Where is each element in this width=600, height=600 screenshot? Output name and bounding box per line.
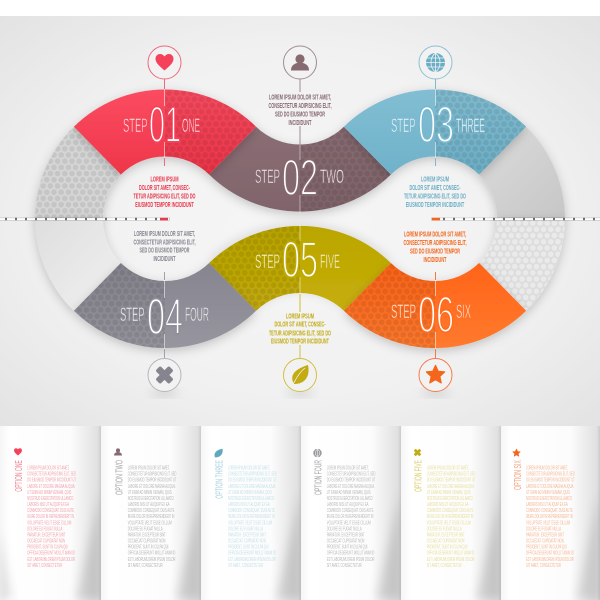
text block: option two body: PROIDENT, SUNT IN CULPA QUI [128,545,168,551]
text block: option five body: CONSECTETUR ADIPISICING ELIT, SED [427,472,476,478]
card: option five [401,426,501,600]
panel: step one band [74,89,256,174]
text block: step one caption: EIUSMOD TEMPOR INCIDIDUNT [135,202,194,209]
text: ONE [182,116,200,137]
text block: option three body: LABORE ET DOLORE MAGNA ALIQUA. [228,484,276,490]
text block: option three body: DOLORE EU FUGIAT NULLA [228,526,263,532]
left stitched seam [0,218,170,221]
text block: option five body: LOREM IPSUM DOLOR SIT AMET, [427,466,469,472]
text block: option three body: OFFICIA DESERUNT MOLLIT ANIM ID [228,551,276,557]
text block: option six body: SIT AMET, CONSECTETUR [526,563,561,569]
text block: option five body: DOLORE EU FUGIAT NULLA [427,526,462,532]
text block: option five body: OCCAECAT CUPIDATAT NON [427,538,465,544]
text block: option three body: LABORIS NISI UT ALIQUIP EX EA [228,502,270,508]
text block: option two body: IRURE DOLOR IN REPREHENDERIT IN [128,514,175,520]
label: step 04 four: 04 [147,288,183,345]
text block: option four body: CONSECTETUR ADIPISICING ELIT, SED [327,472,376,478]
text block: option four body: NOSTRUD EXERCITATION ULLAMCO [327,496,373,502]
text block: option two body: LABORE ET DOLORE MAGNA ALIQUA. [128,484,176,490]
icon: option six star [513,449,520,456]
text block: step five caption: TETUR ADIPISICING ELIT, SED DO [269,330,331,337]
text block: option one body [27,466,76,569]
panel: step four band [74,263,256,348]
panel: step five band [209,226,391,311]
text block: option one body: DOLORE EU FUGIAT NULLA [27,526,63,532]
text block: option three body: NOSTRUD EXERCITATION ULLAMCO [228,496,274,502]
label: option two: OPTION TWO [114,460,126,495]
text block: step six caption [404,232,467,264]
text block: step one caption [134,176,196,209]
text: SIX [456,302,471,323]
label: step 02 two: STEP [255,167,280,188]
text block: option four body: SIT AMET, CONSECTETUR [327,563,362,569]
text: FOUR [185,305,209,326]
text block: option one body: SIT AMET, CONSECTETUR [27,563,63,569]
text: THREE [456,116,485,137]
panel: step three band [344,89,526,174]
label: step 01 one: STEP [123,116,148,137]
card: option six [501,426,600,600]
text block: option one body: PARIATUR. EXCEPTEUR SINT [27,532,65,538]
text block: option five body: LABORE ET DOLORE MAGNA ALIQUA. [427,484,475,490]
label: step 05 five: 05 [282,231,318,288]
text block: step one caption: DOLOR SIT AMET, CONSEC- [139,185,190,192]
text block: option five body: EST LABORUMLOREM IPSUM DOLOR [427,557,475,563]
text block: step five caption: DOLOR SIT AMET, CONSEC- [274,322,326,329]
text block: option four body: IRURE DOLOR IN REPREHENDERIT IN [327,514,374,520]
text block: step six caption: LOREM IPSUM DOLOR SIT AMET, [404,232,466,239]
text block: option two body: NOSTRUD EXERCITATION ULLAMCO [128,496,174,502]
text block: option two body: LOREM IPSUM DOLOR SIT AMET, [128,466,170,472]
text block: step two caption: INCIDIDUNT [288,120,312,127]
text block: option four body: EST LABORUMLOREM IPSUM DOLOR [327,557,375,563]
text block: step two caption [268,94,332,127]
text block: step four caption: CONSECTETUR ADIPISICING ELIT, [134,239,196,246]
connector: step six [434,272,436,358]
text block: option four body: VOLUPTATE VELIT ESSE CILLUM [327,520,371,526]
text block: option five body: OFFICIA DESERUNT MOLLIT ANIM ID [427,551,475,557]
text block: option four body: PARIATUR. EXCEPTEUR SINT [327,532,365,538]
label: option one: OPTION ONE [14,460,25,492]
label: step 02 two [255,149,344,206]
text block: option one body: OFFICIA DESERUNT MOLLIT ANIM ID [27,551,75,557]
connector: step two [299,79,301,213]
text block: step one caption: TETUR ADIPISICING ELIT, SED DO [134,193,196,200]
label: step 01 one: 01 [149,96,181,153]
text block: option five body: PROIDENT, SUNT IN CULPA QUI [427,545,467,551]
text block: option four body: OFFICIA DESERUNT MOLLIT ANIM ID [327,551,375,557]
text block: option three body: PARIATUR. EXCEPTEUR SINT [228,532,266,538]
text block: option five body: UT ENIM AD MINIM VENIAM, QUIS [427,490,471,496]
label: option five: OPTION FIVE [414,460,424,492]
text block: option four body [327,466,376,569]
text block: step two caption: SED DO EIUSMOD TEMPOR [275,111,325,118]
text block: step six caption: CONSECTETUR ADIPISICING ELIT, [404,240,467,247]
text block: option five body: SIT AMET, CONSECTETUR [427,563,462,569]
text block: option two body: OFFICIA DESERUNT MOLLIT ANIM ID [128,551,176,557]
text block: option five body [427,466,476,569]
label: step 01 one [123,96,200,153]
text block: option five body: VOLUPTATE VELIT ESSE CILLUM [427,520,471,526]
icon: option five cross [412,447,423,458]
connector: step three [434,79,436,166]
text block: step four caption: SED DO EIUSMOD TEMPOR [140,248,190,255]
text block: option four body: LOREM IPSUM DOLOR SIT AMET, [327,466,369,472]
label: option six: OPTION SIX [513,460,524,490]
text block: step three caption: LOREM IPSUM [421,176,449,183]
text block: option three body: PROIDENT, SUNT IN CULPA QUI [228,545,269,551]
text block: option six body [526,466,575,569]
text block: option four body: LABORIS NISI UT ALIQUIP EX EA [327,502,369,508]
text block: option two body [128,466,177,569]
label: option four: OPTION FOUR [314,460,324,495]
text block: option three body: EST LABORUMLOREM IPSUM DOLOR [228,557,276,563]
card: option one [0,426,101,600]
panel: right upper grey ring [479,127,565,220]
text block: step five caption: EIUSMOD TEMPOR INCIDIDUNT [271,339,329,346]
label: step 02 two: TWO [320,167,344,188]
panel: step two band [209,127,391,212]
label: step 02 two: 02 [282,149,318,206]
text block: option one body: COMMODO CONSEQUAT. DUIS AUTE [27,508,74,514]
text: FIVE [320,252,340,273]
text block: option four body: COMMODO CONSEQUAT. DUIS AUTE [327,508,374,514]
text block: option three body: LOREM IPSUM DOLOR SIT AMET, [228,466,270,472]
text block: option five body: DO EIUSMOD TEMPOR INCIDIDUNT UT [427,478,475,484]
text block: option two body: LABORIS NISI UT ALIQUIP EX EA [128,502,170,508]
text block: step four caption: LOREM IPSUM DOLOR SIT AMET, [134,231,195,238]
text block: option three body: IRURE DOLOR IN REPREHENDERIT IN [228,514,275,520]
text block: option one body: LOREM IPSUM DOLOR SIT AMET, [27,466,69,472]
text block: option one body: OCCAECAT CUPIDATAT NON [27,538,65,544]
icon: heart badge [148,46,181,79]
text block: option two body: COMMODO CONSEQUAT. DUIS AUTE [128,508,175,514]
connector: step one [164,79,166,166]
text block: step three caption: EIUSMOD TEMPOR INCIDIDUNT [406,202,465,209]
text block: option three body: SIT AMET, CONSECTETUR [228,563,263,569]
connector: step four [164,272,166,358]
text block: option one body: IRURE DOLOR IN REPREHENDERIT IN [27,514,74,520]
text block: option two body: UT ENIM AD MINIM VENIAM, QUIS [128,490,172,496]
label: step 03 three: STEP [391,116,416,137]
panel: left upper grey patterned ring [35,127,121,220]
text block: option one body: LABORIS NISI UT ALIQUIP EX EA [27,502,69,508]
label: step 06 six [391,286,471,343]
label: step 05 five [255,231,340,288]
card: option three [201,426,301,600]
icon: option two person [114,448,122,456]
text block: option two body: OCCAECAT CUPIDATAT NON [128,538,166,544]
text block: step one caption: LOREM IPSUM [150,176,179,183]
label: step 04 four: STEP [120,305,144,326]
icon: option three leaf [215,449,223,457]
icon: star badge [419,358,452,392]
label: step 03 three: 03 [418,96,454,153]
text block: option two body: PARIATUR. EXCEPTEUR SINT [128,532,166,538]
text block: option three body: CONSECTETUR ADIPISICING ELIT, SED [228,472,277,478]
text block: option one body: PROIDENT, SUNT IN CULPA QUI [27,545,68,551]
text block: step four caption: INCIDIDUNT [154,256,176,263]
text block: option five body: NOSTRUD EXERCITATION ULLAMCO [427,496,473,502]
text block: option one body: LABORE ET DOLORE MAGNA ALIQUA. [27,484,75,490]
text block: step three caption: DOLOR SIT AMET, CONSEC- [410,185,461,192]
text block: option four body: OCCAECAT CUPIDATAT NON [327,538,365,544]
text block: step six caption: INCIDIDUNT [424,257,447,264]
text block: option one body: UT ENIM AD MINIM VENIAM, QUIS [27,490,72,496]
card: option four [301,426,401,600]
text block: option three body: COMMODO CONSEQUAT. DUIS AUTE [228,508,275,514]
text block: option two body: DOLORE EU FUGIAT NULLA [128,526,163,532]
text block: option one body: CONSECTETUR ADIPISICING ELIT, SED [27,472,76,478]
text block: option two body: SIT AMET, CONSECTETUR [128,563,163,569]
text block: option one body: EST LABORUMLOREM IPSUM DOLOR [27,557,75,563]
text block: option four body: UT ENIM AD MINIM VENIAM, QUIS [327,490,371,496]
text block: step two caption: CONSECTETUR ADIPISICING ELIT, [268,103,332,110]
label: option three: OPTION THREE [214,460,226,499]
text block: option four body: PROIDENT, SUNT IN CULPA QUI [327,545,367,551]
text block: option two body: VOLUPTATE VELIT ESSE CILLUM [128,520,172,526]
icon: leaf badge [284,358,316,392]
icon: globe badge [419,46,452,79]
label: step 03 three [391,96,485,153]
text block: option two body: EST LABORUMLOREM IPSUM DOLOR [128,557,176,563]
card: option two [101,426,201,600]
text block: option one body: NOSTRUD EXERCITATION ULLAMCO [27,496,73,502]
text block: option three body: OCCAECAT CUPIDATAT NON [228,538,266,544]
text block: step three caption [404,176,466,209]
text block: step four caption [134,231,196,263]
text block: option three body [228,466,277,569]
text block: option five body: PARIATUR. EXCEPTEUR SINT [427,532,465,538]
text block: option one body: VOLUPTATE VELIT ESSE CILLUM [27,520,71,526]
text block: step six caption: SED DO EIUSMOD TEMPOR [410,249,460,256]
shadows under bottom badges [150,390,450,396]
text block: option five body: COMMODO CONSEQUAT. DUIS AUTE [427,508,474,514]
text block: option two body: CONSECTETUR ADIPISICING ELIT, SED [128,472,177,478]
text block: step five caption [269,313,331,346]
panel: right lower patterned ring [479,218,565,311]
text block: step five caption: LOREM IPSUM [286,313,314,320]
connector: step five [299,225,301,358]
panel: left lower light ring [35,218,121,311]
panel: step six band [344,263,526,348]
text block: option six body: PROIDENT, SUNT IN CULPA QUI [526,545,567,551]
text block: option six body: DOLORE EU FUGIAT NULLA [526,526,561,532]
text block: option six body: OCCAECAT CUPIDATAT NON [526,538,564,544]
text block: option two body: DO EIUSMOD TEMPOR INCIDIDUNT UT [128,478,176,484]
right stitched seam [431,218,600,221]
label: step 06 six: STEP [391,302,416,323]
text block: option four body: DO EIUSMOD TEMPOR INCIDIDUNT UT [327,478,375,484]
text block: option three body: VOLUPTATE VELIT ESSE CILLUM [228,520,272,526]
text block: option one body: DO EIUSMOD TEMPOR INCIDIDUNT UT [27,478,76,484]
icon: option one heart [14,448,22,456]
text block: option three body: DO EIUSMOD TEMPOR INCIDIDUNT UT [228,478,277,484]
text block: option three body: UT ENIM AD MINIM VENIAM, QUIS [228,490,272,496]
text block: step two caption: LOREM IPSUM DOLOR SIT AMET, [269,94,331,101]
text block: option five body: LABORIS NISI UT ALIQUIP EX EA [427,502,469,508]
icon: cross badge [148,358,181,392]
icon: option four globe [313,449,322,457]
icon: person badge [284,46,316,79]
label: step 05 five: STEP [255,252,280,273]
text block: step three caption: TETUR ADIPISICING ELIT, SED DO [404,193,466,200]
label: step 04 four [120,288,209,345]
text block: option five body: IRURE DOLOR IN REPREHENDERIT IN [427,514,474,520]
text block: option four body: LABORE ET DOLORE MAGNA ALIQUA. [327,484,375,490]
text block: option four body: DOLORE EU FUGIAT NULLA [327,526,362,532]
label: step 06 six: 06 [418,286,454,343]
text block: option six body: PARIATUR. EXCEPTEUR SINT [526,532,564,538]
